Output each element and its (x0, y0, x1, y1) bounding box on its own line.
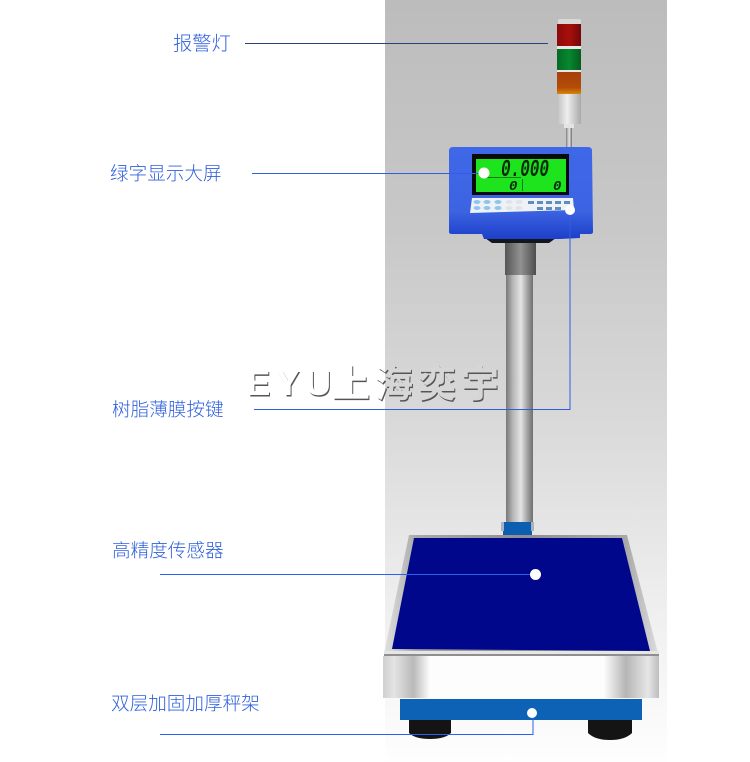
leader: alarm light (245, 42, 548, 44)
weighing indicator (449, 147, 593, 243)
background panel (385, 0, 667, 762)
LCD screen (472, 154, 569, 195)
weighing platform (383, 535, 659, 720)
label: display: 绿字显示大屏 (110, 163, 222, 184)
leader and dot: frame (160, 708, 537, 734)
watermark: EYU (247, 364, 337, 403)
watermark: EYU (248, 366, 338, 404)
LCD screen: 0 (509, 179, 517, 195)
watermark (247, 364, 505, 408)
LCD screen: 0 (553, 179, 561, 195)
pole and bracket (505, 243, 536, 525)
leader and dot: display (252, 168, 490, 178)
label: membrane keys: 树脂薄膜按键 (112, 399, 224, 420)
LCD screen: 0.000 (501, 157, 549, 184)
feet (409, 719, 632, 740)
leader and dot: membrane keys (254, 205, 575, 410)
membrane keypad (470, 198, 574, 213)
label: frame: 双层加固加厚秤架 (111, 693, 260, 714)
icon: alarm light tower (557, 19, 581, 148)
label: alarm light: 报警灯 (173, 33, 231, 55)
watermark: 上海奕宇 (332, 364, 504, 406)
platform collar (501, 522, 534, 536)
label: sensor: 高精度传感器 (112, 540, 224, 561)
watermark: 上海奕宇 (333, 366, 505, 408)
leader and dot: sensor (160, 569, 541, 580)
